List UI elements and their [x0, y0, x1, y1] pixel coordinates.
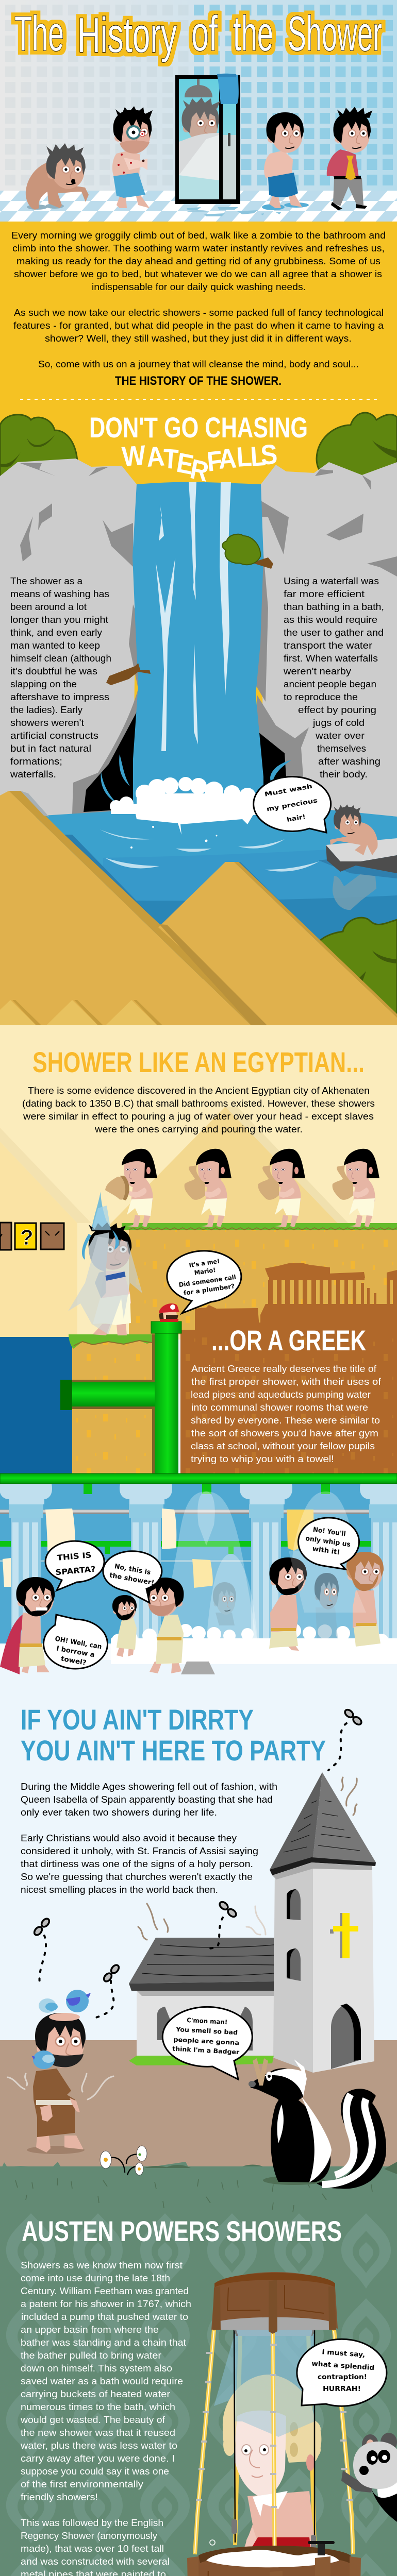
- text: right waterfall column: after washing: [318, 756, 381, 767]
- text: feetham paragraph: Century. William Feetham was granted: [21, 2286, 189, 2296]
- text: egyptian paragraph: [22, 1086, 375, 1134]
- title: [14, 6, 382, 63]
- text: greek paragraph: shared by everyone. These were similar to: [191, 1415, 380, 1426]
- text: left waterfall column: means of washing has: [10, 589, 109, 599]
- text: right waterfall column: transport the water: [284, 640, 372, 651]
- text: right waterfall column: water over: [315, 731, 365, 741]
- intro text: As such we now take our electric showers - some packed full of fancy technological: [14, 308, 384, 318]
- character: zombie standing: [112, 106, 153, 208]
- text: egyptian paragraph: were the ones carrying and pouring the water.: [94, 1124, 303, 1134]
- text: middle ages: Early Christians would also avoid it because they: [21, 1833, 237, 1843]
- text: greek paragraph: class at school, without your fellow pupils: [191, 1441, 375, 1451]
- text: egyptian paragraph: There is some evidence discovered in the Ancient Egyptian city of Akhenaten: [28, 1086, 370, 1096]
- text: right waterfall column: far more efficient: [284, 589, 365, 599]
- character: mario: [159, 1303, 179, 1322]
- text: feetham paragraph: of the first environmentally: [21, 2479, 143, 2489]
- panel: egypt cream background: [0, 1025, 397, 1340]
- text: feetham paragraph: the new shower was that it reused: [21, 2428, 175, 2438]
- text: left waterfall column: longer than you might: [10, 615, 108, 625]
- text: right waterfall column: first. When waterfalls: [284, 653, 378, 664]
- heading: if you ain't dirrty: IF YOU AIN'T DIRRTY: [21, 1703, 254, 1736]
- text: left waterfall column: been around a lot: [10, 602, 87, 612]
- text: middle ages: only ever taken two showers during her life.: [21, 1807, 217, 1818]
- intro text: climb into the shower. The soothing warm water instantly revives and refreshes us,: [12, 243, 385, 253]
- speech bubble: this is sparta: [45, 1541, 104, 1590]
- text: egyptian paragraph: were similar in effect to pouring a jug of water over your head - except slaves: [23, 1111, 374, 1122]
- intro text: indispensable for our daily quick washing needs.: [92, 282, 306, 292]
- speech bubble: mario: [167, 1251, 241, 1313]
- text: left waterfall column: man wanted to keep: [10, 640, 100, 651]
- text: feetham paragraph: bather was standing and a chain that: [21, 2337, 186, 2348]
- text: feetham paragraph: carrying buckets of heated water: [21, 2389, 170, 2399]
- text: left waterfall column: The shower as a: [10, 576, 83, 586]
- heading: if you ain't dirrty: YOU AIN'T HERE TO PARTY: [21, 1734, 326, 1767]
- text: middle ages: that dirtiness was one of the signs of a holy person.: [21, 1859, 253, 1869]
- speech bubble: mario: for a plumber?: [183, 1282, 235, 1297]
- text: right waterfall column: to reproduce the: [284, 692, 358, 702]
- foam on shower floor: [0, 1621, 397, 1664]
- text: feetham paragraph: would get wasted. The beauty of: [20, 2415, 166, 2425]
- speech bubble: can I borrow a towel: OH! Well, can: [54, 1635, 103, 1651]
- title: the: [233, 6, 273, 61]
- text: regency paragraph: This was followed by the English: [21, 2518, 163, 2528]
- text: middle ages: Queen Isabella of Spain apparently boasting that she had: [21, 1794, 273, 1805]
- flowers: [100, 2146, 147, 2175]
- character: caveman on rock with reflection: [319, 804, 397, 910]
- intro text: shower before we go to bed, but whatever we do we can all agree that a shower is: [14, 269, 382, 279]
- speech bubble: what a splendid contraption: what a splendid: [311, 2360, 375, 2372]
- church: [129, 1772, 376, 2073]
- blocks: mario style: [0, 1223, 64, 1250]
- character: egyptian man being showered: [68, 1206, 142, 1335]
- blocks: mario style: ?: [20, 1225, 34, 1249]
- pool of water: [0, 810, 397, 979]
- speech bubble: mario: It's a me!: [189, 1258, 220, 1269]
- heading: don't go chasing waterfalls: DON'T GO CHASING: [89, 411, 308, 444]
- text: feetham paragraph: down on himself. This system also: [21, 2363, 172, 2374]
- text: right waterfall column: than bathing in a bath,: [284, 602, 384, 612]
- tree branches with bush: [106, 534, 273, 685]
- blue water behind platform and platform: [0, 1334, 155, 1473]
- intro text: features - for granted, but what did people in the past do when it came to having a: [13, 320, 384, 331]
- text: greek paragraph: [191, 1364, 382, 1464]
- foam at waterfall base: [110, 777, 260, 849]
- characters: blurred background men: [213, 1582, 338, 1638]
- waterfall: [133, 482, 263, 824]
- text: feetham paragraph: water, plus there was less water to: [20, 2441, 177, 2451]
- text: right waterfall column: Using a waterfall was: [284, 576, 379, 586]
- text: left waterfall column: think, and even early: [10, 628, 102, 638]
- speech bubble: what a splendid contraption: I must say,: [322, 2348, 366, 2359]
- speech bubble: you smell so bad: C'mon man!: [187, 2016, 228, 2026]
- speech bubble: you'll only whip us: No! You'll: [312, 1526, 346, 1538]
- panel: bathroom intro scene: [0, 0, 397, 222]
- character: zombie crouching: [26, 143, 89, 210]
- text: middle ages: nicest smelling places in the world back then.: [21, 1885, 218, 1895]
- text: right waterfall column: ancient people began: [284, 679, 376, 689]
- speech bubble: mario: Did someone call: [178, 1274, 237, 1289]
- text: left waterfall column: himself clean (although: [10, 653, 111, 664]
- text: feetham paragraph: [20, 2260, 191, 2502]
- text: middle ages: [21, 1782, 277, 1895]
- text: greek paragraph: lead pipes and aqueducts pumping water: [191, 1389, 371, 1400]
- text: left waterfall column: but in fact natural: [10, 743, 91, 754]
- ground and grass panel: [0, 2040, 397, 2576]
- text: left waterfall column: it's doubtful he was: [10, 666, 97, 676]
- text: feetham paragraph: Showers as we know them now first: [21, 2260, 183, 2270]
- character: dressed man with tie: [327, 107, 372, 210]
- panel: greek communal shower room: [0, 1484, 397, 2045]
- pyramids: [0, 791, 397, 1025]
- character: blue background man: [315, 1573, 339, 1609]
- text: right waterfall column: the user to gather and: [284, 628, 384, 638]
- text: egyptian paragraph: (dating back to 1350 B.C) that small bathrooms existed. However, these showers: [22, 1098, 375, 1109]
- title: of: [191, 6, 218, 61]
- text: right waterfall column: jugs of cold: [312, 718, 365, 728]
- text: feetham paragraph: a patent for his shower in 1767, which: [21, 2299, 191, 2309]
- text: left waterfall column: the ladies). Early: [10, 705, 82, 715]
- character: skunk with clothes peg: [249, 2058, 386, 2189]
- flies with dotted paths: [33, 1708, 363, 2018]
- character: monk with birds: [27, 1990, 91, 2154]
- text: left waterfall column: formations;: [10, 756, 62, 767]
- text: regency paragraph: Regency Shower (anonymously: [21, 2531, 157, 2541]
- panel: yellow intro background: [0, 222, 397, 845]
- soap bubbles: [20, 2540, 370, 2576]
- bushes on cliff tops: [0, 413, 397, 479]
- speech bubble: what a splendid contraption: [297, 2339, 387, 2406]
- speech bubble: can I borrow a towel: [43, 1615, 107, 1669]
- text: greek paragraph: the sort of showers you'd have after gym: [191, 1428, 378, 1438]
- text: right waterfall column: their body.: [320, 769, 368, 779]
- text: greek paragraph: Ancient Greece really deserves the title of: [191, 1364, 377, 1374]
- water pouring from jug: [92, 1192, 109, 1228]
- drain: [181, 1662, 215, 1674]
- speech bubble: can I borrow a towel: towel?: [60, 1655, 87, 1667]
- stink lines: [8, 1777, 357, 2099]
- speech bubble: can I borrow a towel: I borrow a: [56, 1645, 95, 1659]
- text: left waterfall column: aftershave to impress: [10, 692, 109, 702]
- intro text: making us ready for the day ahead and getting rid of any grubbiness. Some of us: [16, 256, 381, 266]
- intro text: THE HISTORY OF THE SHOWER.: [115, 374, 282, 388]
- text: feetham paragraph: the bather pulled to bring water: [21, 2350, 161, 2361]
- text: greek paragraph: trying to whip you with a towel!: [191, 1454, 334, 1464]
- speech bubble: what a splendid contraption: contraption!: [318, 2374, 367, 2381]
- speech bubble: must wash my precious hair: Must wash: [264, 783, 313, 798]
- text: left waterfall column: [10, 576, 111, 779]
- speech bubble: no this is the shower: [103, 1551, 162, 1603]
- heading: if you ain't dirrty: [21, 1703, 326, 1767]
- character: red haired bather: [346, 1552, 384, 1647]
- heading: don't go chasing waterfalls: [89, 411, 308, 487]
- text: feetham paragraph: included a pump that pushed water to: [21, 2312, 188, 2322]
- intro text: Every morning we groggily climb out of bed, walk like a zombie to the bathroom and: [11, 230, 386, 241]
- text: feetham paragraph: carry away after you were done. I: [21, 2453, 175, 2464]
- text: regency paragraph: made), that was over 10 feet tall: [21, 2544, 164, 2554]
- character: dark haired bather: [269, 1557, 307, 1651]
- speech bubble: you smell so bad: You smell so bad: [175, 2026, 238, 2036]
- text: feetham paragraph: suppose you could say it was one: [21, 2466, 169, 2477]
- cliffs: [0, 459, 397, 824]
- text: right waterfall column: [283, 576, 384, 779]
- speech bubble: must wash my precious hair: my precious: [266, 796, 318, 813]
- speech bubble: no this is the shower: the shower!: [109, 1571, 155, 1587]
- text: right waterfall column: as this would require: [284, 615, 377, 625]
- text: left waterfall column: artificial constructs: [10, 731, 98, 741]
- text: greek paragraph: into communal shower rooms that were: [191, 1402, 368, 1413]
- text: right waterfall column: weren't nearby: [283, 666, 351, 676]
- speech bubble: you'll only whip us: [298, 1518, 359, 1569]
- speech bubble: this is sparta: THIS IS: [57, 1550, 92, 1563]
- speech bubble: you smell so bad: think I'm a Badger: [172, 2045, 240, 2056]
- sand, grass, greek silhouette: [122, 1223, 397, 1473]
- regency shower contraption: [180, 2272, 368, 2576]
- text: regency paragraph: [21, 2518, 218, 2576]
- character: leonidas: [0, 1577, 55, 1674]
- speech bubble: you smell so bad: people are gonna: [173, 2036, 239, 2046]
- text: left waterfall column: slapping on the: [10, 679, 77, 689]
- heading: don't go chasing waterfalls: WATERFALLS: [121, 438, 278, 487]
- shower mist over bathers: [289, 1551, 366, 1613]
- water sprays in shower room: [160, 1492, 376, 1643]
- text: feetham paragraph: an upper basin from where the: [21, 2325, 159, 2335]
- speech bubble: this is sparta: SPARTA?: [55, 1564, 96, 1577]
- text: middle ages: So we're guessing that churches weren't exactly the: [21, 1872, 253, 1882]
- speech bubble: you'll only whip us: with it!: [312, 1545, 340, 1556]
- character: panda peeking: [341, 2433, 397, 2522]
- speech bubble: you smell so bad: [162, 2007, 252, 2079]
- speech bubble: you'll only whip us: only whip us: [305, 1535, 351, 1549]
- text: right waterfall column: effect by pouring: [298, 705, 376, 715]
- text: right waterfall column: themselves: [317, 743, 366, 754]
- intro text: shower? Well, they still washed, but they just did it in different ways.: [45, 333, 352, 344]
- slaves with jugs: [105, 1149, 379, 1227]
- text: left waterfall column: waterfalls.: [10, 769, 56, 779]
- text: greek paragraph: the first proper shower, with their uses of: [191, 1377, 382, 1387]
- intro text: [11, 230, 386, 388]
- title: The: [14, 6, 64, 61]
- character: washed man in towel: [262, 112, 309, 210]
- green pipes: [0, 1321, 397, 1484]
- shower cabin: [175, 74, 282, 216]
- text: middle ages: considered it unholy, with St. Francis of Assisi saying: [21, 1846, 258, 1856]
- character: bearded robed man: [146, 1578, 184, 1673]
- text: feetham paragraph: saved water as a bath would require: [21, 2376, 183, 2386]
- text: feetham paragraph: come into use during the late 18th: [21, 2273, 170, 2283]
- speech bubble: mario: Mario!: [194, 1266, 216, 1277]
- text: regency paragraph: and was constructed with several: [21, 2556, 170, 2567]
- speech bubble: no this is the shower: No, this is: [114, 1563, 152, 1577]
- speech bubble: must wash my precious hair: [254, 777, 331, 833]
- title: History: [77, 8, 177, 63]
- speech bubble: must wash my precious hair: hair!: [286, 813, 306, 823]
- intro text: So, come with us on a journey that will cleanse the mind, body and soul...: [38, 359, 359, 369]
- speech bubble: what a splendid contraption: HURRAH!: [323, 2385, 361, 2393]
- character: small robed man: [112, 1595, 137, 1657]
- text: middle ages: During the Middle Ages showering fell out of fashion, with: [21, 1782, 277, 1792]
- text: left waterfall column: showers weren't: [10, 718, 84, 728]
- text: feetham paragraph: numerous times to the bath, which: [21, 2402, 175, 2412]
- text: feetham paragraph: friendly showers!: [21, 2492, 98, 2502]
